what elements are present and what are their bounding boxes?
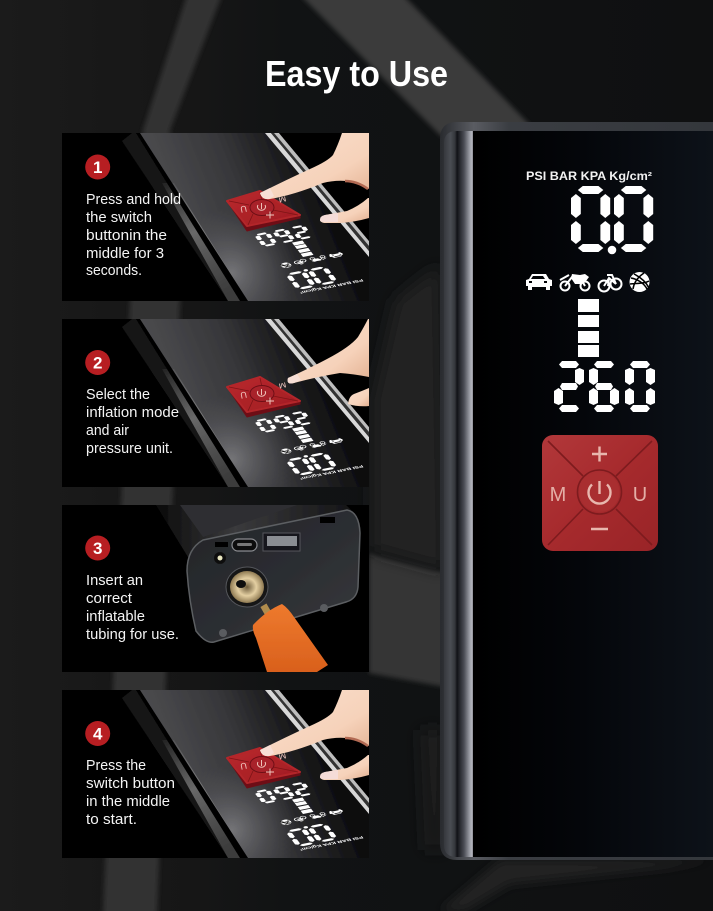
step 4 text: Press the — [86, 758, 146, 774]
step 1 badge — [85, 154, 110, 180]
step 3 text: tubing for use. — [86, 627, 179, 643]
step 2 text: Select the — [86, 387, 150, 403]
photo: air nozzle end of the device — [62, 505, 369, 672]
photo: selecting the mode — [62, 319, 369, 487]
step 2 text: pressure unit. — [86, 441, 173, 457]
step 3 text: correct — [86, 591, 132, 607]
step 1 text: the switch — [86, 210, 152, 226]
step 4 text: in the middle — [86, 794, 170, 810]
step 2 text: and air — [86, 423, 129, 439]
title: Easy to Use — [265, 53, 448, 94]
photo: pressing the switch to start — [62, 690, 369, 858]
step 2 badge — [85, 350, 110, 375]
step 1 text: seconds. — [86, 263, 142, 279]
control button: U — [633, 484, 647, 506]
control button: M — [550, 484, 566, 506]
step 1 text — [86, 192, 181, 279]
step 4 badge: 4 — [93, 724, 103, 744]
step 3 text — [86, 573, 179, 643]
device: air pump front — [440, 122, 713, 860]
step 3 text: inflatable — [86, 609, 145, 625]
step 2 text: inflation mode — [86, 405, 179, 421]
panel: step 4 — [62, 690, 369, 858]
step 4 text: to start. — [86, 812, 137, 828]
LCD readouts, mode icons and pressure bars — [526, 186, 655, 412]
step 3 badge — [85, 536, 110, 560]
step 1 text: middle for 3 — [86, 246, 164, 262]
panel: step 2 — [62, 319, 369, 487]
step 1 badge: 1 — [93, 158, 102, 177]
step 4 badge — [85, 721, 110, 746]
step 1 text: Press and hold — [86, 192, 181, 208]
panel: step 3 — [62, 505, 369, 672]
step 2 text — [86, 387, 179, 457]
step 4 text — [86, 758, 175, 828]
control button — [542, 435, 658, 551]
step 3 text: Insert an — [86, 573, 143, 589]
panel: step 1 — [62, 133, 369, 301]
step 3 badge: 3 — [93, 539, 102, 558]
step 1 text: buttonin the — [86, 228, 167, 244]
step 2 badge: 2 — [93, 354, 102, 372]
unit labels: PSI BAR KPA Kg/cm² — [526, 171, 652, 183]
photo: pressing the power button — [62, 133, 369, 301]
step 4 text: switch button — [86, 776, 175, 792]
